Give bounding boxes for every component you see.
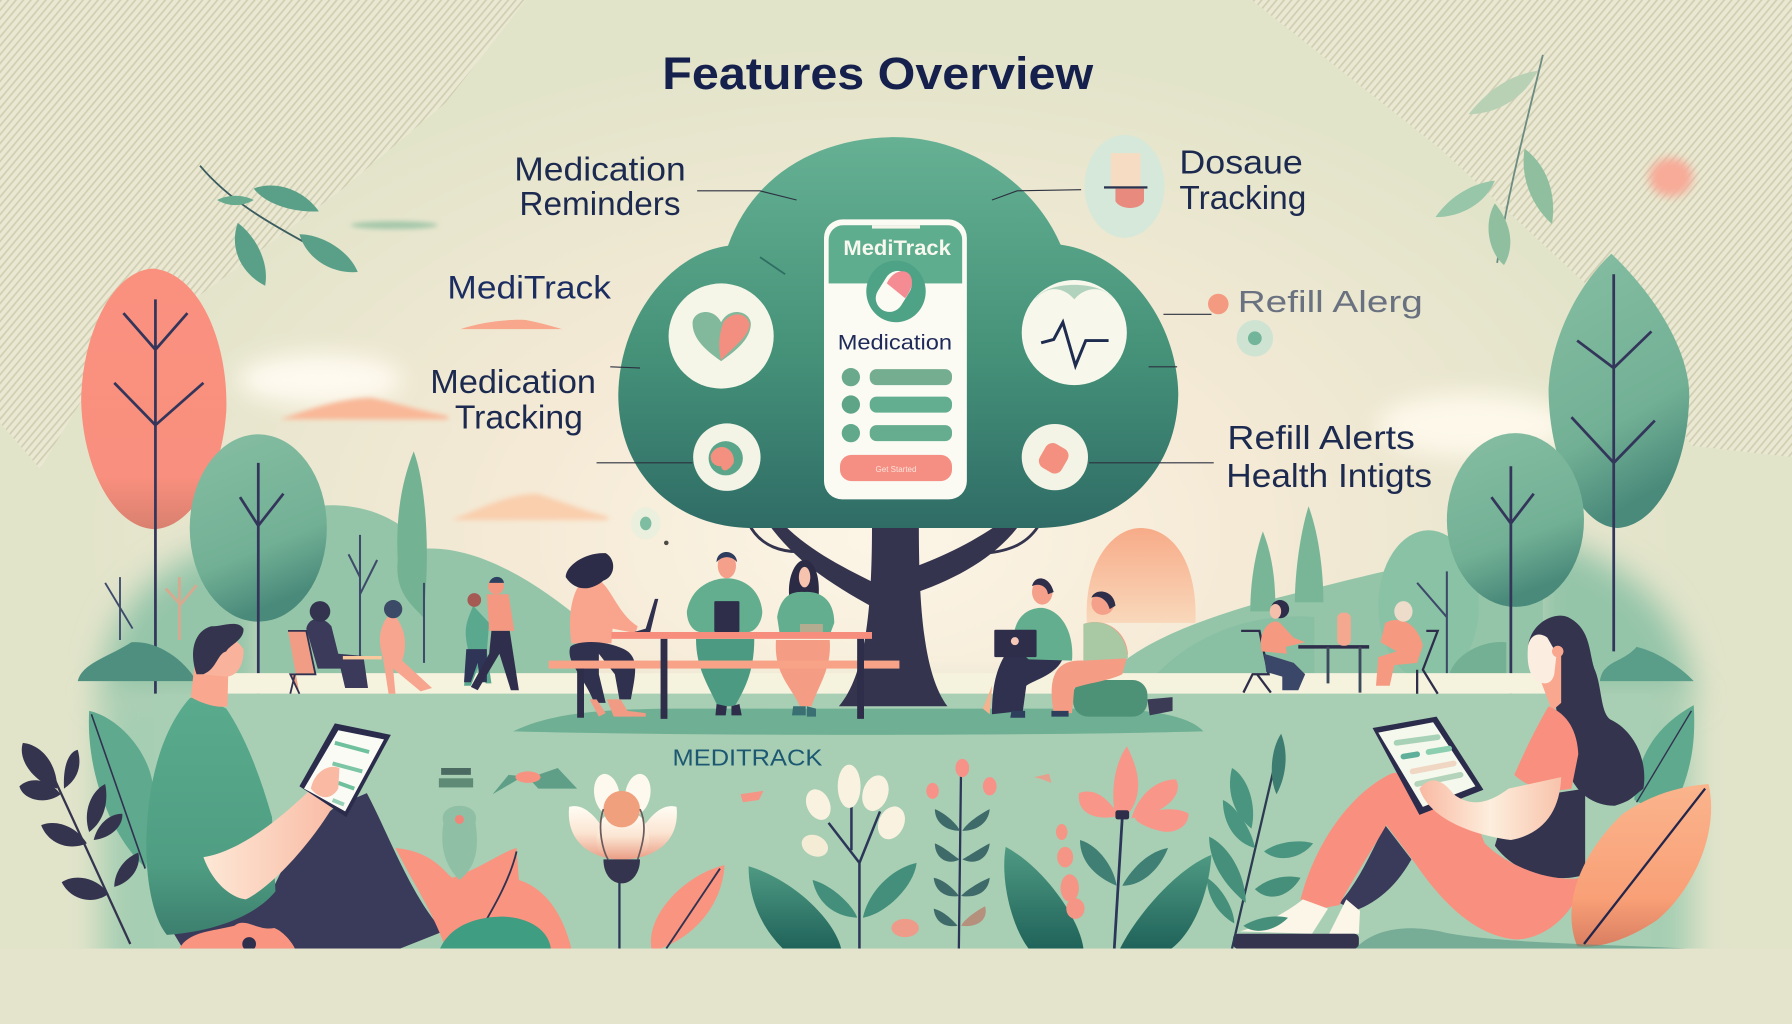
hair <box>193 624 243 674</box>
rock seat <box>1073 680 1147 717</box>
small bare trees <box>105 535 1447 674</box>
label: refill alerts health insights: Refill Alerts <box>1227 420 1415 457</box>
hair <box>1528 616 1644 806</box>
phone button: Get Started <box>876 465 916 474</box>
branch top right <box>1435 55 1553 265</box>
ground patch under tree <box>513 709 1203 735</box>
canopy <box>618 137 1178 528</box>
arm <box>1419 777 1561 840</box>
label: refill alerts health insights: Health Intigts <box>1226 458 1432 495</box>
large leaf left of plant <box>1004 847 1083 949</box>
path strip <box>224 673 1554 694</box>
head <box>197 634 244 677</box>
shrub right mid <box>1449 642 1506 674</box>
coral leaves by man <box>179 848 571 951</box>
meadow <box>154 694 1651 949</box>
right pair under tree <box>983 578 1173 718</box>
white bud plant <box>798 765 917 949</box>
peach arch <box>1087 528 1196 623</box>
far foot <box>1329 899 1360 934</box>
cypress right pair <box>1250 506 1323 611</box>
bottom band <box>0 949 1792 1024</box>
hatched corner top right <box>1251 0 1792 457</box>
picnic group <box>549 552 899 719</box>
label: medication reminders: Reminders <box>519 186 681 223</box>
plant beside woman <box>1207 734 1313 949</box>
label: dosage tracking: Tracking <box>1179 180 1306 217</box>
dark plant far left <box>19 743 139 944</box>
label: meditrack: MediTrack <box>447 269 612 305</box>
white flower <box>569 772 677 949</box>
ground shrub right <box>1355 928 1689 949</box>
tablet <box>1373 717 1483 815</box>
soft clouds <box>238 158 1693 520</box>
coral flower <box>1079 746 1189 949</box>
shirt <box>146 695 275 935</box>
far leg <box>1339 825 1411 911</box>
laptop <box>634 599 658 632</box>
bench <box>549 661 899 669</box>
meditrack ground label: MEDITRACK <box>673 745 822 771</box>
cafe table right <box>1241 600 1438 694</box>
background hills left <box>258 505 585 686</box>
tablet <box>299 723 391 817</box>
medication rows <box>842 368 952 442</box>
neck <box>191 661 229 707</box>
label: refill alerts health insights <box>1226 420 1432 495</box>
large leaf right of plant <box>1120 855 1211 949</box>
leaf behind woman <box>1634 705 1694 817</box>
face <box>1528 634 1557 683</box>
pill icon <box>866 261 926 322</box>
torso <box>1495 789 1585 878</box>
shoe bar <box>1233 934 1359 949</box>
main tree <box>618 137 1178 706</box>
small peach sapling <box>166 577 197 640</box>
phone heading: Medication <box>838 330 952 355</box>
near foot <box>1240 899 1328 934</box>
arm <box>203 768 343 899</box>
low hill right <box>1157 616 1314 674</box>
table woman <box>570 576 638 643</box>
coral tree left <box>81 269 226 694</box>
background hills right <box>1097 537 1543 686</box>
small pond stack decoration <box>439 768 577 880</box>
green tree right large <box>1549 254 1689 651</box>
legs <box>1301 773 1583 939</box>
label: dosage tracking: Dosaue <box>1179 145 1303 182</box>
label: medication reminders <box>514 152 686 223</box>
soft green meadow edge <box>101 531 1694 992</box>
icon: small left circle <box>693 423 761 491</box>
large leaf under white flowers <box>749 866 841 949</box>
dome tree right <box>1378 530 1479 681</box>
coral petals floating <box>741 774 1085 937</box>
phone header <box>829 225 962 283</box>
center woman <box>789 560 819 600</box>
table legs <box>577 639 864 719</box>
green tree left <box>190 434 327 694</box>
label: medication tracking: Tracking <box>455 400 583 437</box>
label: dosage tracking <box>1179 145 1306 217</box>
hand <box>311 767 339 797</box>
woman with tablet <box>1233 616 1694 949</box>
icon: dosage capsule <box>1085 135 1165 238</box>
man with tablet <box>89 624 443 949</box>
top <box>1514 706 1578 790</box>
pants <box>158 793 443 949</box>
neck <box>1538 651 1561 711</box>
two walkers <box>464 577 519 690</box>
branch top left <box>200 166 358 286</box>
branches <box>768 514 1023 608</box>
icon: refill dots <box>1208 294 1273 357</box>
label: medication tracking: Medication <box>430 364 596 401</box>
phone brand: MediTrack <box>843 235 952 260</box>
cypress left <box>397 451 427 617</box>
icon: small bubble <box>631 507 669 545</box>
shrub right <box>1600 647 1694 681</box>
shrub left <box>78 642 197 681</box>
label: medication reminders: Medication <box>514 152 686 189</box>
hatched corner top left <box>0 0 526 469</box>
center man <box>687 578 762 632</box>
phone <box>824 219 967 499</box>
orange leaf <box>1571 784 1711 947</box>
green tree right small <box>1447 433 1584 694</box>
icon: heart circle <box>669 283 774 389</box>
label: refill alerts faded: Refill Alerg <box>1238 284 1423 319</box>
table top <box>611 632 872 639</box>
trunk <box>839 526 947 706</box>
phone button <box>840 455 952 481</box>
label: medication tracking <box>430 364 596 437</box>
leaf behind man <box>89 711 153 869</box>
title: Features Overview <box>662 48 1094 99</box>
icon: heartbeat circle <box>1022 280 1127 385</box>
small coral plant <box>926 759 997 949</box>
small couple on bench <box>288 600 432 694</box>
coral leaf by flower <box>651 865 725 949</box>
icon: small right circle <box>1022 424 1088 490</box>
leader lines <box>597 190 1214 463</box>
